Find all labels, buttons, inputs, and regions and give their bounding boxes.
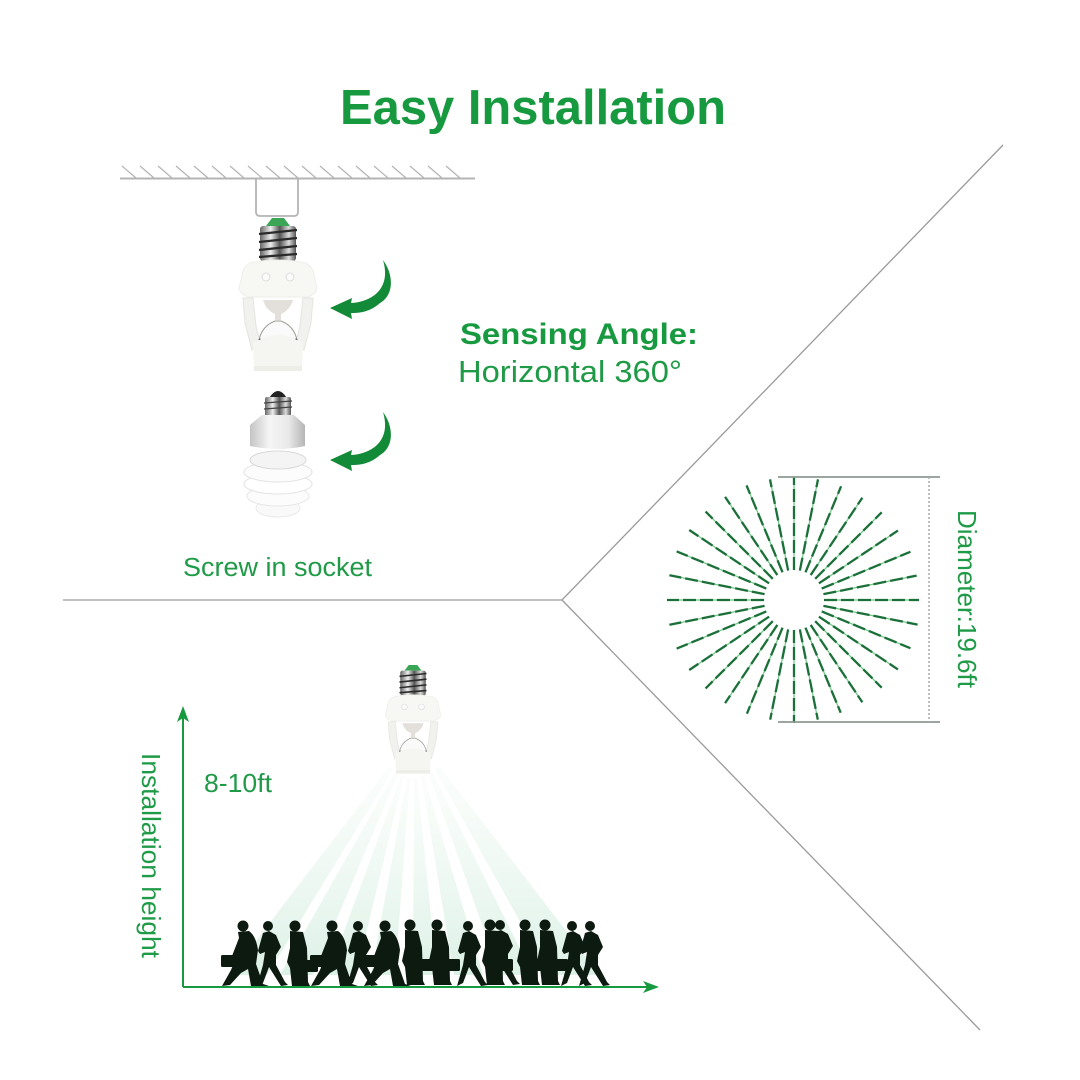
sensor socket (top) <box>239 218 317 371</box>
screw in socket label: Screw in socket <box>183 554 372 582</box>
curved arrow: bulb <box>330 412 391 471</box>
detection beams <box>230 768 600 975</box>
walking people silhouettes <box>221 920 610 986</box>
installation height label: Installation height <box>136 753 166 959</box>
CFL bulb <box>244 391 312 517</box>
panel dividers <box>63 145 1003 1030</box>
height and floor axes <box>177 706 659 993</box>
height value: 8-10ft <box>204 768 273 798</box>
diameter bracket <box>778 477 940 722</box>
sensing angle heading: Sensing Angle: <box>460 318 698 351</box>
diameter label: Diameter:19.6ft <box>952 510 982 689</box>
sensing angle value: Horizontal 360° <box>458 354 682 389</box>
title: Easy Installation <box>340 81 726 135</box>
sensing burst diagram <box>667 477 919 723</box>
sensor socket (bottom) <box>385 665 441 774</box>
ceiling mount with hanger <box>120 166 475 216</box>
curved arrow: socket <box>330 260 391 319</box>
